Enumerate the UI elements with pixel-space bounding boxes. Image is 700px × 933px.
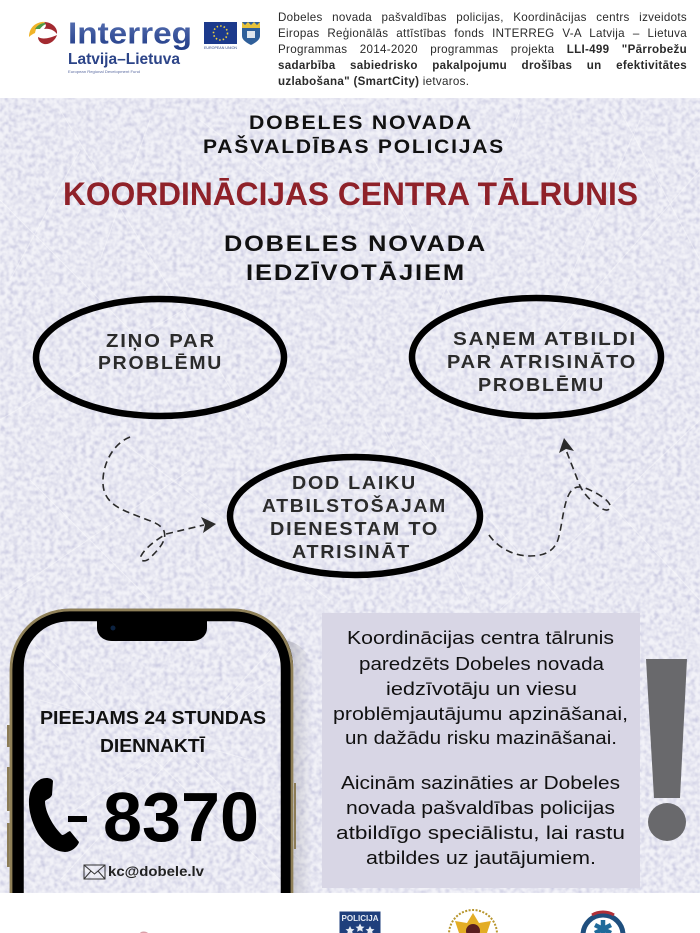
camera: [110, 626, 116, 630]
fund caption: European Regional Development Fund: [68, 69, 140, 74]
footer mark: [140, 932, 148, 933]
step: receive the answer: [412, 298, 661, 416]
availability text: [40, 708, 266, 756]
step: give time to the service: [230, 457, 480, 575]
paragraph: purpose: un dažādu risku mazināšanai.: [345, 728, 617, 748]
Interreg wordmark: Interreg: [68, 16, 192, 50]
paragraph: invitation: atbildes uz jautājumiem.: [366, 848, 596, 868]
logo: emergency medical service: [583, 912, 623, 933]
phone notch: [97, 620, 207, 641]
step: receive the answer: PAR ATRISINĀTO: [447, 352, 637, 372]
dash: [68, 816, 87, 822]
icon: Dobele coat of arms: [242, 22, 260, 45]
paragraph: invitation: atbildīgo speciālistu, lai rastu: [336, 823, 625, 843]
icon: EU flag: EUROPEAN UNION: [204, 45, 237, 50]
subheading line: Dobeles novada: DOBELES NOVADA: [224, 231, 487, 256]
paragraph: invitation: novada pašvaldības policijas: [346, 798, 615, 818]
Latvija-Lietuva wordmark: Latvija–Lietuva: [68, 51, 180, 68]
availability text: DIENNAKTĪ: [100, 736, 206, 756]
main title: KOORDINĀCIJAS CENTRA TĀLRUNIS: [63, 176, 638, 212]
phone frame: [18, 615, 287, 893]
icon: telephone handset: [29, 778, 79, 852]
paragraph: invitation: Aicinām sazināties ar Dobeles: [341, 773, 620, 793]
paragraph: purpose: iedzīvotāju un viesu: [386, 679, 577, 699]
availability text: PIEEJAMS 24 STUNDAS: [40, 708, 266, 728]
paragraph: invitation: [336, 773, 625, 868]
step: give time to the service: ATRISINĀT: [292, 542, 411, 562]
heading line: pašvaldības policijas: PAŠVALDĪBAS POLICIJAS: [203, 136, 505, 158]
phone mockup: [7, 610, 296, 893]
phone number: 8370: [103, 778, 259, 856]
step: give time to the service: DIENESTAM TO: [270, 519, 439, 539]
header project text: Dobeles novada pašvaldības policijas, Koordinācijas centrs izveidots: [278, 11, 687, 24]
paragraph: purpose: paredzēts Dobeles novada: [359, 654, 605, 674]
subheading line: iedzīvotājiem: IEDZĪVOTĀJIEM: [246, 260, 466, 285]
step: report the problem: [36, 299, 284, 416]
paragraph: purpose: [333, 628, 628, 748]
email address: kc@dobele.lv: [108, 863, 204, 879]
header project text: Programmas 2014-2020 programmas projekta LLI-499 "Pārrobežu: [278, 43, 687, 56]
step: receive the answer: PROBLĒMU: [478, 375, 605, 395]
logo: Interreg Latvija-Lietuva: [29, 16, 192, 74]
arrow: left dashed: [103, 437, 216, 561]
side buttons: [7, 725, 296, 867]
paragraph: purpose: Koordinācijas centra tālrunis: [347, 628, 614, 648]
icon: envelope: [84, 865, 105, 879]
arrow: right dashed: [489, 438, 610, 556]
step: give time to the service: DOD LAIKU: [292, 473, 417, 493]
step: receive the answer: SAŅEM ATBILDI: [453, 329, 637, 349]
header project text: uzlabošana" (SmartCity) ietvaros.: [278, 75, 469, 88]
step: report the problem: ZIŅO PAR: [106, 331, 216, 351]
heading line: Dobeles novada: DOBELES NOVADA: [249, 113, 473, 134]
step: report the problem: PROBLĒMU: [98, 353, 223, 373]
phone shadow: [280, 640, 312, 893]
logo: fire and rescue service: [449, 910, 497, 933]
header project text: sadarbība sabiedrisko pakalpojumu drošības un efektivitātes: [278, 59, 687, 72]
icon: Interreg swirl: [29, 22, 57, 44]
header project text: Eiropas Reģionālās attīstības fonds INTERREG V-A Latvija – Lietuva: [278, 27, 687, 40]
step: give time to the service: ATBILSTOŠAJAM: [262, 495, 447, 516]
header project text: [278, 11, 687, 88]
icon: exclamation mark: [646, 659, 687, 841]
title: [63, 113, 638, 285]
panel: info text: [322, 613, 640, 888]
icon: EU flag: [204, 22, 237, 50]
logo: police: [340, 912, 380, 933]
logo: police: POLICIJA: [342, 914, 379, 923]
paragraph: purpose: problēmjautājumu apzināšanai,: [333, 704, 628, 724]
